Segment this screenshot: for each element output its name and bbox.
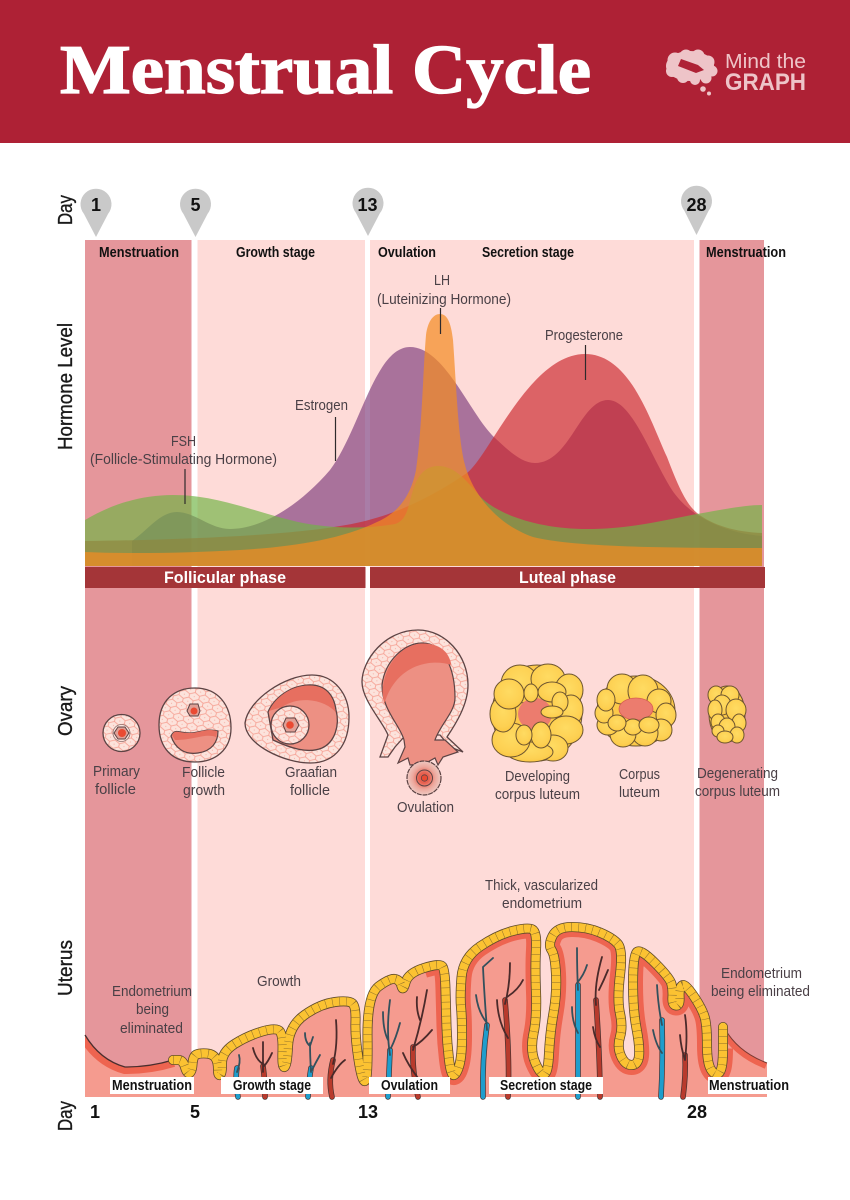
label: FSH: (Follicle-Stimulating Hormone) (90, 452, 277, 468)
day pin 1: 1 (91, 195, 101, 215)
axis label: Hormone Level: Hormone Level (55, 323, 77, 450)
corpus luteum (595, 674, 676, 801)
bottom stage labels (110, 1077, 790, 1094)
note: endometrium being eliminated right (711, 966, 810, 1000)
dark surface line right (725, 1029, 767, 1063)
stage labels top (99, 245, 786, 261)
panel: ovulation and secretion (370, 240, 694, 1097)
degenerating corpus luteum (695, 686, 780, 800)
day numbers bottom: 5 (190, 1102, 200, 1122)
logo: Mind the Graph: Mind the (725, 51, 806, 73)
panel: growth stage (198, 240, 365, 1097)
ovulation follicle (362, 630, 468, 816)
day numbers bottom: 1 (90, 1102, 100, 1122)
label: menstruation right: Menstruation (709, 1078, 789, 1094)
Graafian follicle (245, 675, 349, 799)
Graafian follicle: follicle (290, 783, 330, 799)
day pin 1 (80, 189, 112, 237)
label: ovulation: Ovulation (381, 1078, 438, 1094)
stage labels top: Secretion stage (482, 245, 574, 261)
follicle growth: growth (183, 783, 225, 799)
LH curve (85, 314, 762, 566)
follicle growth: Follicle (182, 765, 225, 781)
note: endometrium being eliminated left: eliminated (120, 1021, 183, 1037)
developing corpus luteum: corpus luteum (495, 787, 580, 803)
label: LH: (Luteinizing Hormone) (377, 292, 511, 308)
primary follicle (93, 714, 141, 798)
label: Progesterone (545, 328, 623, 380)
yellow epithelium band (173, 927, 723, 1081)
label: LH (377, 273, 511, 334)
uterus lining cross-section (85, 920, 767, 1098)
degenerating corpus luteum: Degenerating (697, 766, 778, 782)
dark surface line left (85, 1035, 173, 1067)
label: menstruation: Menstruation (112, 1078, 192, 1094)
note: thick vascularized endometrium: endometrium (502, 896, 582, 912)
note: thick vascularized endometrium: Thick, vascularized (485, 878, 598, 894)
axis label: Day bottom: Day (55, 1101, 77, 1131)
panel: menstruation left (85, 240, 192, 1097)
day markers top (80, 186, 712, 237)
developing corpus luteum (490, 664, 583, 803)
corpus luteum: luteum (619, 785, 660, 801)
estrogen curve (132, 347, 762, 566)
axis label: Day top: Day (55, 195, 77, 225)
label: growth stage: Growth stage (233, 1078, 311, 1094)
label: Estrogen (295, 398, 348, 461)
developing corpus luteum: Developing (505, 769, 570, 785)
header banner (0, 0, 850, 143)
red vascular edge (85, 927, 767, 1075)
note: endometrium being eliminated left (112, 984, 192, 1037)
primary follicle: follicle (95, 782, 136, 798)
phase bar: follicular: Follicular phase (164, 568, 286, 587)
day pin 28 (681, 186, 712, 235)
follicle growth (159, 688, 231, 799)
progesterone curve (85, 354, 762, 566)
day numbers bottom: 28 (687, 1102, 707, 1122)
hormone level chart (85, 273, 762, 566)
label: Progesterone: Progesterone (545, 328, 623, 344)
ovary stages (93, 630, 780, 816)
day pin 13: 13 (357, 195, 378, 215)
note: endometrium being eliminated right: Endometrium (721, 966, 802, 982)
blood vessels (236, 948, 686, 1097)
label: Estrogen: Estrogen (295, 398, 348, 414)
logo: Mind the Graph (666, 50, 806, 96)
day pin 5: 5 (190, 195, 201, 215)
logo: Mind the Graph: GRAPH (725, 69, 806, 96)
corpus luteum: Corpus (619, 767, 660, 783)
title: Menstrual Cycle (60, 32, 591, 109)
Graafian follicle: Graafian (285, 765, 337, 781)
note: endometrium being eliminated left: Endometrium (112, 984, 192, 1000)
phase bar: luteal: Luteal phase (519, 568, 616, 587)
axis label: Uterus: Uterus (55, 940, 77, 996)
axis label: Ovary: Ovary (55, 686, 77, 736)
note: thick vascularized endometrium (485, 878, 598, 912)
panel: menstruation right (700, 240, 764, 1097)
endometrium body (85, 937, 767, 1097)
label: FSH: FSH (171, 434, 196, 450)
uterus annotations (112, 878, 810, 1037)
stage labels top: Growth stage (236, 245, 315, 261)
degenerating corpus luteum: corpus luteum (695, 784, 780, 800)
ovulation follicle: Ovulation (397, 800, 454, 816)
phase bar: follicular (85, 567, 366, 588)
day numbers bottom (90, 1102, 707, 1122)
label: FSH (90, 434, 277, 504)
note: growth: Growth (257, 974, 301, 990)
day pin 28: 28 (686, 195, 707, 215)
stage labels top: Ovulation (378, 245, 436, 261)
label: secretion stage: Secretion stage (500, 1078, 592, 1094)
day pin 13 (353, 188, 384, 236)
note: endometrium being eliminated left: being (136, 1002, 169, 1018)
primary follicle: Primary (93, 764, 141, 780)
day pin 5 (180, 189, 211, 237)
phase bar: luteal (370, 567, 765, 588)
stage labels top: Menstruation (706, 245, 786, 261)
FSH curve (85, 466, 762, 566)
day numbers bottom: 13 (358, 1102, 378, 1122)
stage labels top: Menstruation (99, 245, 179, 261)
note: endometrium being eliminated right: being eliminated (711, 984, 810, 1000)
label: LH: LH (434, 273, 450, 289)
